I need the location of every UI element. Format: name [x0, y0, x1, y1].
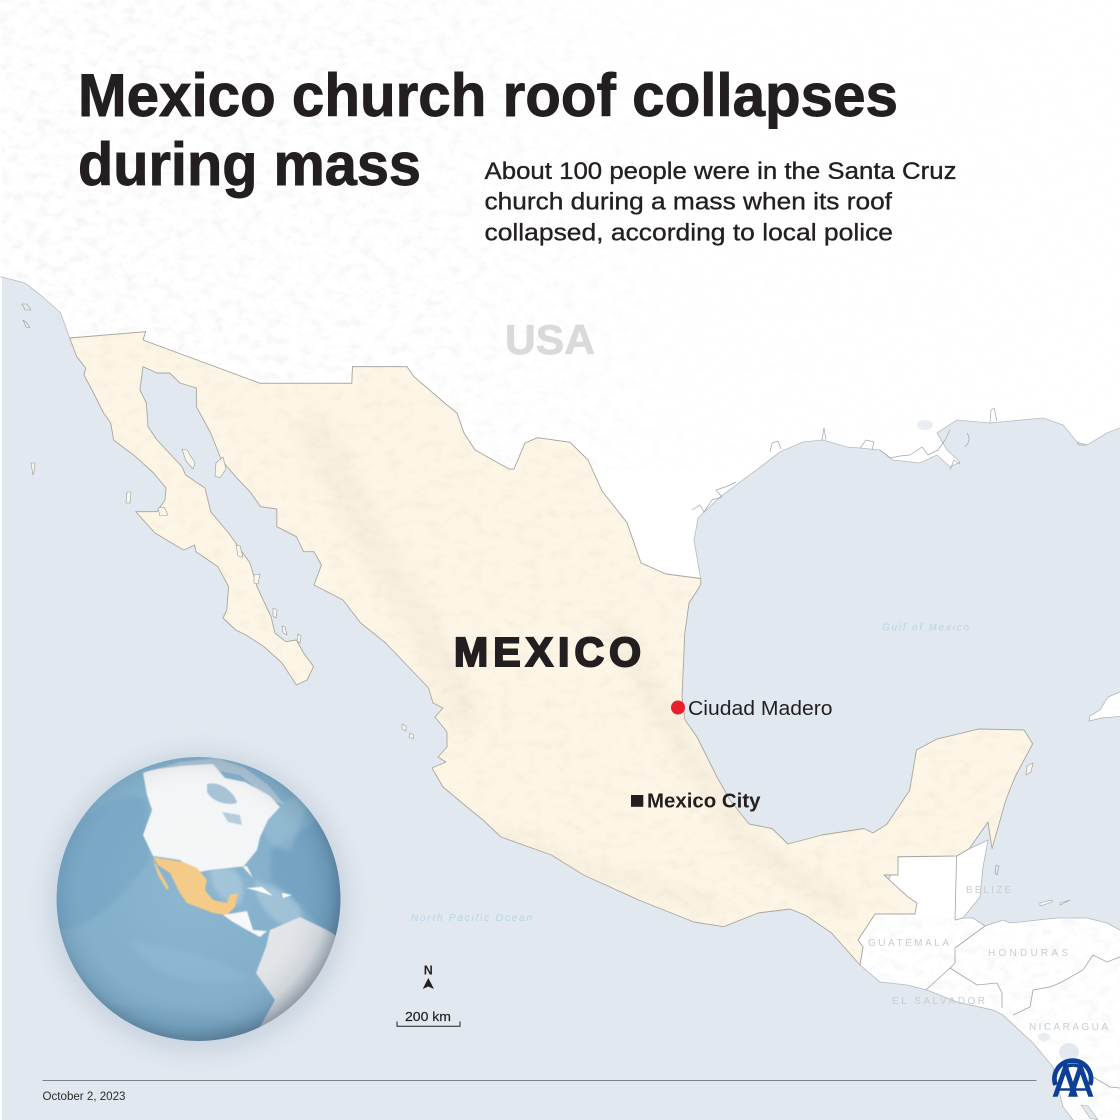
neighbouring country labels	[868, 885, 1108, 1033]
land: Mexico	[60, 325, 1040, 975]
title: Mexico church roof collapses	[78, 62, 898, 129]
label: North Pacific Ocean: North Pacific Ocean	[411, 913, 532, 924]
land: United States	[0, 0, 1120, 578]
land: Central America	[850, 840, 1120, 1120]
north arrow and scale bar	[397, 964, 460, 1026]
globe land: Mexico highlight	[153, 857, 238, 915]
US Gulf coast details	[692, 408, 1087, 512]
subtitle	[484, 158, 956, 246]
marker: Mexico City: Mexico City	[647, 790, 761, 812]
label: USA: USA	[505, 316, 595, 363]
neighbouring country labels: NICARAGUA	[1029, 1022, 1108, 1033]
north arrow and scale bar: 200 km	[405, 1009, 451, 1024]
subtitle: collapsed, according to local police	[484, 220, 893, 246]
subtitle: church during a mass when its roof	[484, 188, 892, 216]
date: October 2, 2023	[42, 1091, 126, 1103]
globe land: Central America	[223, 911, 267, 937]
label: MEXICO: MEXICO	[454, 629, 641, 675]
north arrow and scale bar: N	[424, 964, 433, 978]
islands	[22, 304, 1070, 906]
footer rule	[42, 1080, 1036, 1081]
marker: Ciudad Madero: Ciudad Madero	[688, 698, 832, 720]
neighbouring country labels: GUATEMALA	[868, 938, 949, 949]
title	[78, 62, 898, 198]
subtitle: About 100 people were in the Santa Cruz	[484, 158, 956, 185]
globe locator	[48, 753, 348, 1053]
globe shading	[56, 757, 340, 1041]
label: Gulf of Mexico: Gulf of Mexico	[882, 622, 969, 634]
globe land: South America	[256, 916, 336, 1027]
lakes on the US Gulf coast	[917, 420, 933, 430]
globe land: Caribbean	[246, 887, 292, 898]
neighbouring country labels: HONDURAS	[988, 948, 1068, 959]
globe land: Arctic	[143, 758, 285, 805]
title: during mass	[78, 131, 421, 198]
logo: AA	[1054, 1061, 1092, 1100]
neighbouring country labels: BELIZE	[966, 885, 1011, 896]
globe ocean	[56, 757, 340, 1041]
land: Cuba	[1089, 692, 1120, 721]
globe land: North America	[143, 764, 280, 878]
country borders	[926, 852, 1120, 1088]
neighbouring country labels: EL SALVADOR	[892, 996, 985, 1007]
